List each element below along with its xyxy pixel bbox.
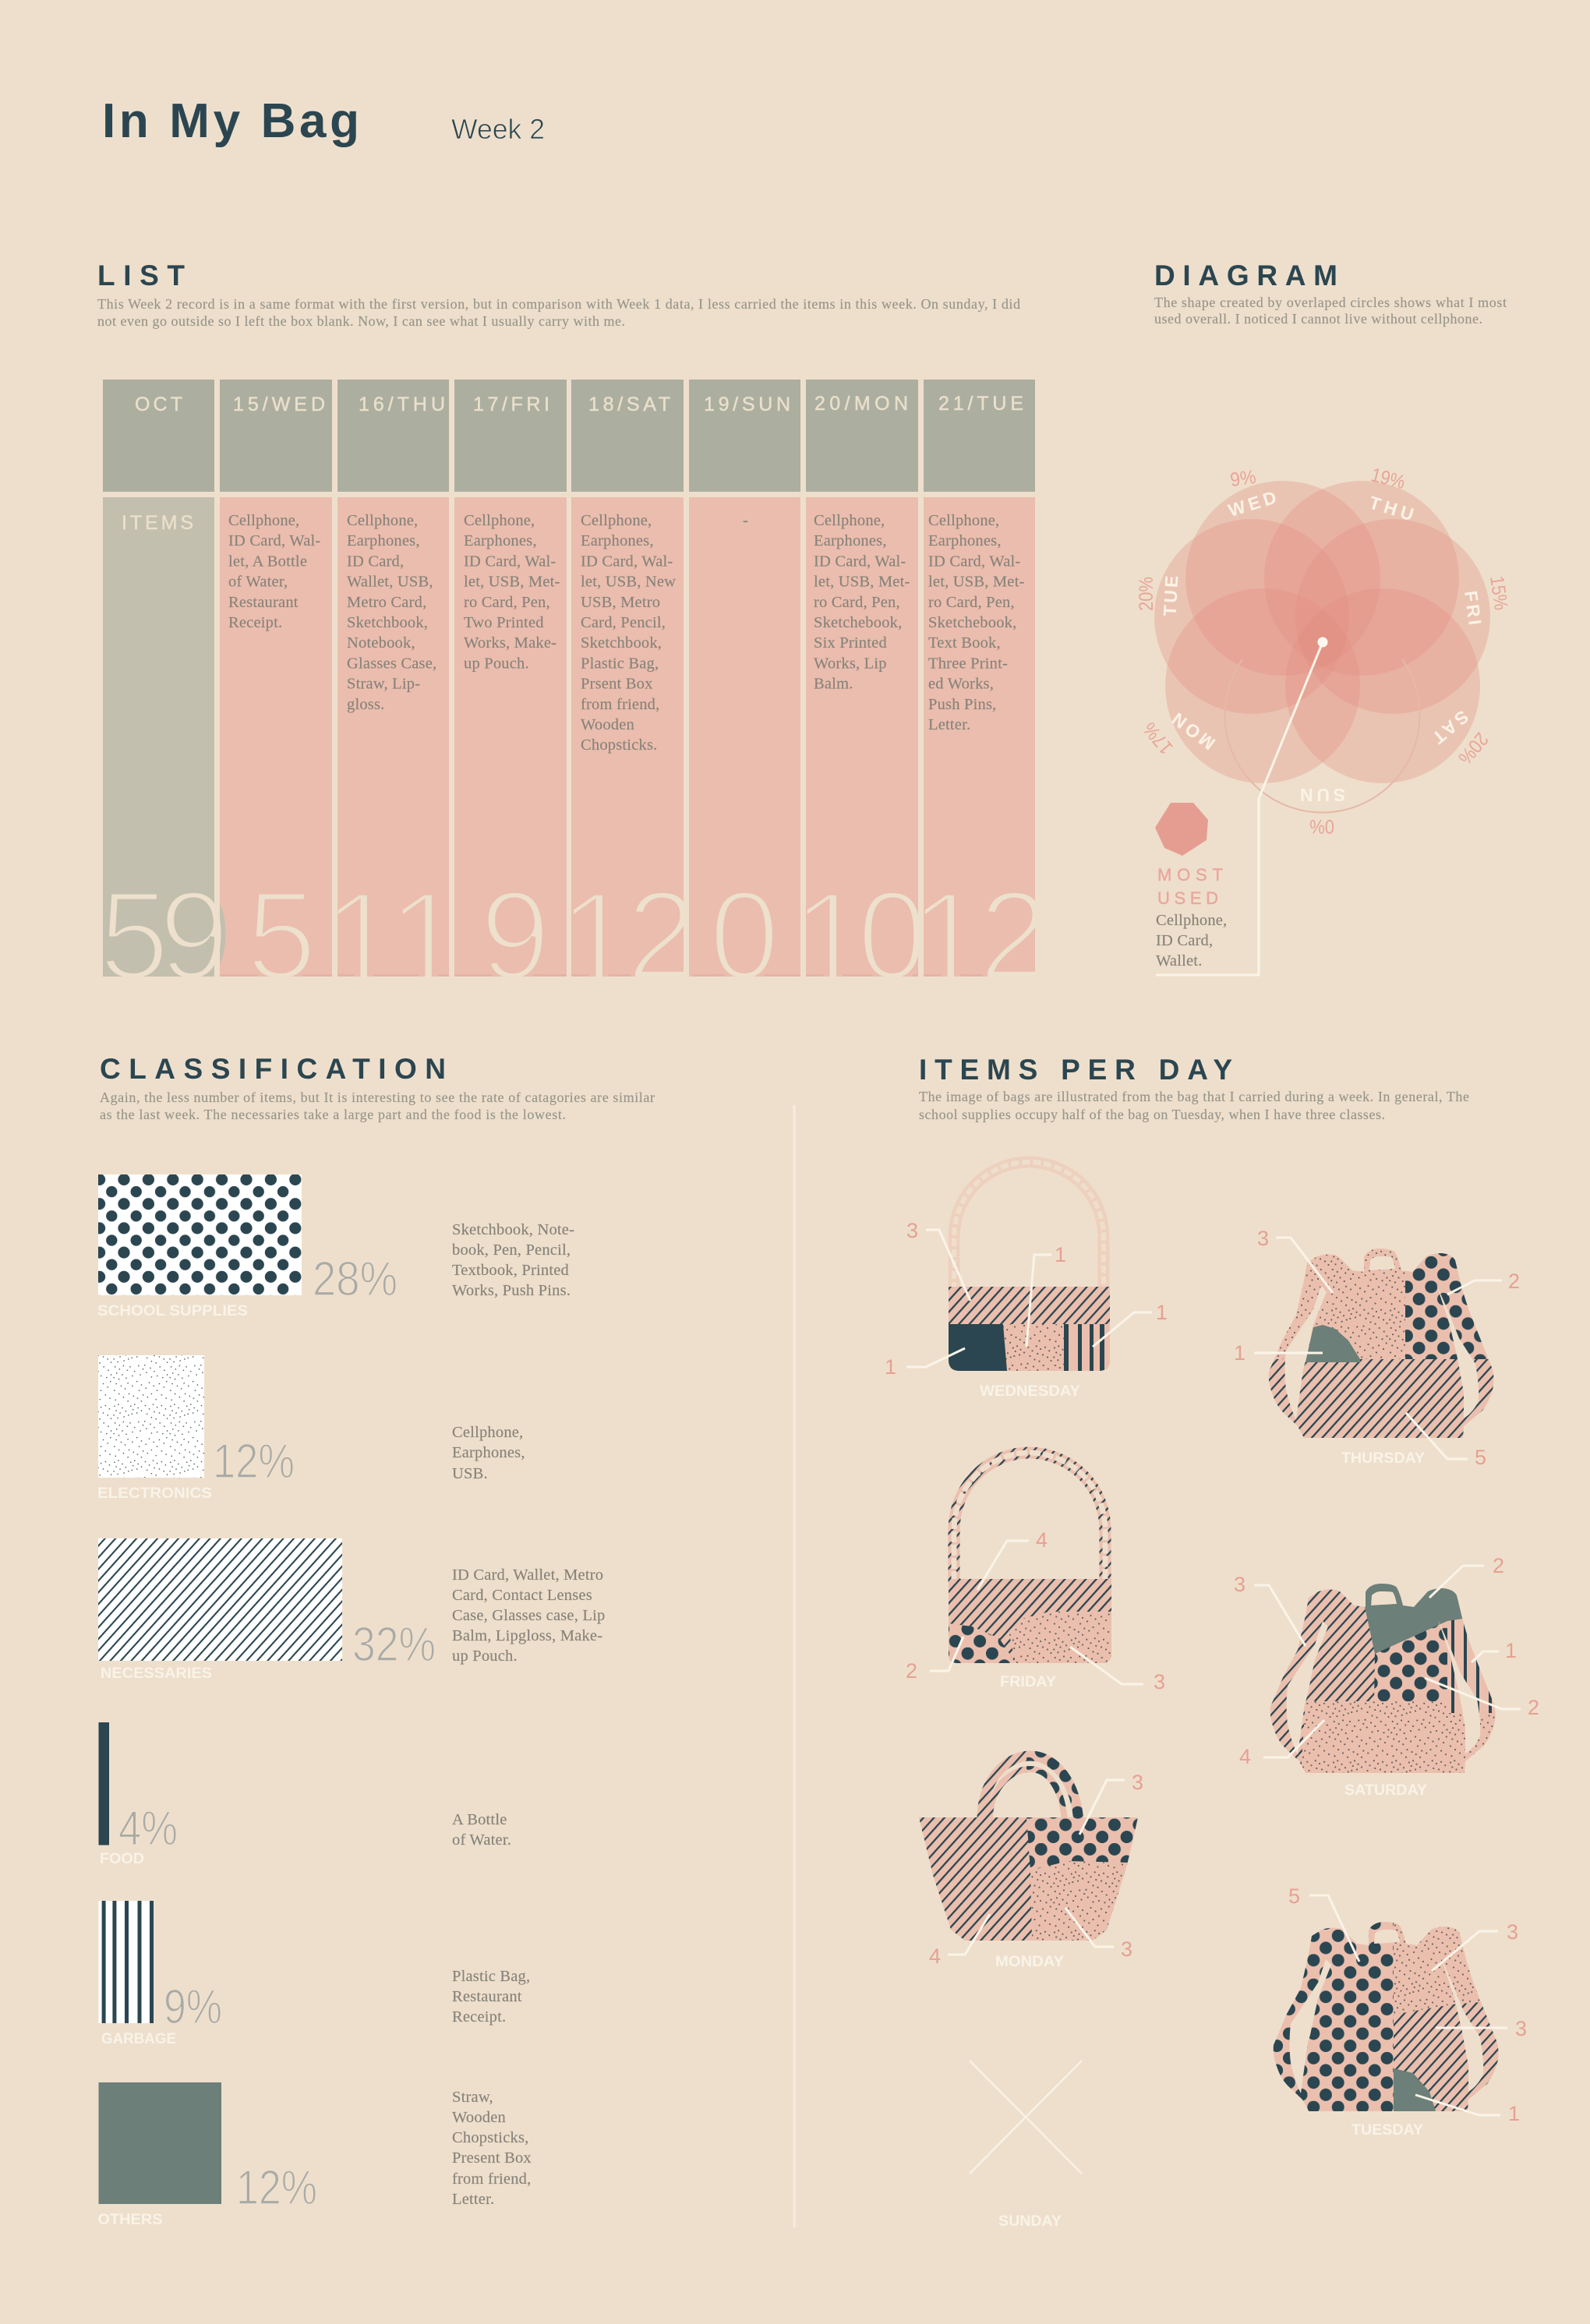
bar: electronics: 12% <box>213 1435 295 1489</box>
heading: items per day: ITEMS PER DAY <box>919 1054 1232 1086</box>
large item counts: 11 <box>321 862 466 1022</box>
diagram description: The shape created by overlaped circles shows what I most <box>1154 295 1507 310</box>
large item counts: 1 <box>790 862 871 1022</box>
classification description: as the last week. The necessaries take a large part and the food is the lowest. <box>100 1107 566 1122</box>
table item columns: Earphones, <box>464 532 537 549</box>
table item columns: Sketchebook, <box>928 614 1016 631</box>
table item columns: Straw, Lip- <box>347 676 420 693</box>
table item columns: Earphones, <box>928 532 1002 549</box>
bar: school supplies <box>97 1174 574 1319</box>
table item columns: Sketchbook, <box>581 634 662 652</box>
label: sunday: SUNDAY <box>998 2213 1062 2230</box>
table header row: 17/FRI <box>473 394 549 415</box>
panel: diagram <box>1136 260 1512 975</box>
bar: food: of Water. <box>452 1831 511 1849</box>
bar: school supplies: Textbook, Printed <box>452 1262 569 1279</box>
percentages: 9% <box>1229 466 1257 491</box>
table item columns: ro Card, Pen, <box>814 594 900 611</box>
label: thursday: THURSDAY <box>1341 1450 1425 1467</box>
table item columns: let, USB, Met- <box>928 574 1025 591</box>
table header row: 15/WED <box>233 394 325 415</box>
large item counts: 5 <box>246 865 316 1006</box>
bar: food <box>98 1722 511 1867</box>
bag: saturday <box>1234 1554 1539 1799</box>
table item columns: - <box>743 512 748 529</box>
percentages <box>1136 464 1512 837</box>
day labels: SAT <box>1429 706 1472 748</box>
bar: others: Present Box <box>452 2149 532 2167</box>
callouts: thursday: 1 <box>1234 1341 1246 1365</box>
percentages: 17% <box>1139 718 1178 758</box>
large item counts <box>86 497 1058 1022</box>
bar: garbage: Plastic Bag, <box>452 1968 530 1985</box>
classification description <box>100 1090 655 1122</box>
callouts: monday: 3 <box>1121 1937 1132 1961</box>
callouts: tuesday: 1 <box>1508 2102 1520 2125</box>
bar: necessaries: 32% <box>352 1618 436 1672</box>
table item columns: ro Card, Pen, <box>464 594 550 611</box>
bar: electronics <box>97 1355 525 1502</box>
table item columns: ID Card, Wal- <box>464 553 556 570</box>
label: friday: FRIDAY <box>1000 1673 1056 1690</box>
list description: This Week 2 record is in a same format with the first version, but in comparison with Week 1 data, I less carried the items in this week. On sunday, I did <box>97 296 1020 312</box>
table item columns: Three Print- <box>928 655 1008 672</box>
table item columns: Balm. <box>814 676 853 693</box>
day labels: TUE <box>1160 575 1182 616</box>
bar: necessaries: Case, Glasses case, Lip <box>452 1607 605 1624</box>
table item columns: Metro Card, <box>347 594 426 611</box>
bag: friday <box>906 1453 1165 1694</box>
table item columns: ID Card, <box>347 553 404 570</box>
panel: classification <box>97 1053 655 2228</box>
table item columns: ID Card, Wal- <box>228 532 320 549</box>
panel: items per day <box>885 1054 1539 2230</box>
bar: others: Wooden <box>452 2109 506 2126</box>
heading: list: LIST <box>97 260 185 291</box>
callouts: friday: 3 <box>1154 1670 1165 1694</box>
day labels: THU <box>1367 492 1416 524</box>
callouts: thursday <box>1234 1227 1520 1469</box>
bar: others: Letter. <box>452 2191 494 2208</box>
large item counts: 59 <box>99 865 229 1006</box>
table item columns: Wallet, USB, <box>347 574 433 591</box>
callouts: saturday: 3 <box>1234 1573 1246 1596</box>
bar: others: 12% <box>236 2161 317 2215</box>
table item columns: USB, Metro <box>581 594 660 611</box>
table item columns: Works, Lip <box>814 655 887 672</box>
bar: garbage: GARBAGE <box>101 2030 176 2047</box>
center dot <box>1317 638 1328 647</box>
bag: tuesday <box>1272 1884 1527 2139</box>
table item columns: let, A Bottle <box>228 553 307 570</box>
table item columns: Cellphone, <box>464 512 535 529</box>
bar: garbage: Receipt. <box>452 2008 506 2026</box>
callouts: friday: 2 <box>906 1659 917 1683</box>
table item columns: Cellphone, <box>228 512 299 529</box>
bar: food: A Bottle <box>452 1811 507 1828</box>
bar: others: Straw, <box>452 2089 493 2106</box>
diagram description <box>1154 295 1507 327</box>
bar: food: FOOD <box>100 1850 144 1867</box>
bar: others <box>98 2082 532 2228</box>
table item columns: of Water, <box>228 574 288 591</box>
callouts: tuesday <box>1288 1884 1527 2125</box>
table item columns: Push Pins, <box>928 696 996 713</box>
day labels: SUN <box>1300 785 1345 805</box>
table item columns: Cellphone, <box>814 512 885 529</box>
table item columns: Earphones, <box>581 532 654 549</box>
table item columns: Six Printed <box>814 634 887 652</box>
callouts: saturday: 1 <box>1505 1639 1517 1662</box>
icon: most used swatch <box>1155 803 1208 856</box>
table item columns: Cellphone, <box>581 512 652 529</box>
bar: electronics: Cellphone, <box>452 1424 523 1441</box>
table item columns: up Pouch. <box>464 655 529 672</box>
callouts: wednesday: 1 <box>885 1355 896 1379</box>
most used items: Cellphone, <box>1156 912 1227 929</box>
table item columns: ed Works, <box>928 676 994 693</box>
percentages: 0% <box>1309 815 1334 837</box>
table item columns: Cellphone, <box>928 512 999 529</box>
most used items: ID Card, <box>1156 932 1213 949</box>
bar: garbage: 9% <box>164 1980 222 2034</box>
day labels: MON <box>1168 708 1219 754</box>
callouts: tuesday: 3 <box>1507 1920 1518 1944</box>
table header row: OCT <box>135 394 182 415</box>
bar: food: 4% <box>118 1802 178 1856</box>
bag: wednesday <box>885 1162 1168 1400</box>
day labels: WED <box>1226 487 1279 521</box>
callouts: tuesday: 5 <box>1288 1884 1300 1908</box>
table item columns: Wooden <box>581 716 634 733</box>
leader line to most used <box>1156 642 1323 975</box>
label: tuesday: TUESDAY <box>1352 2121 1423 2139</box>
large item counts: 2 <box>627 865 697 1006</box>
table item columns: Earphones, <box>814 532 887 549</box>
table item columns: Restaurant <box>228 594 299 611</box>
bar: necessaries: ID Card, Wallet, Metro <box>452 1566 603 1584</box>
table item columns: let, USB, Met- <box>814 574 910 591</box>
overlapping circles <box>1154 481 1490 813</box>
bar: necessaries: up Pouch. <box>452 1648 518 1665</box>
large item counts: 2 <box>979 865 1049 1006</box>
large item counts: 1 <box>556 862 637 1022</box>
bar: garbage: Restaurant <box>452 1988 522 2005</box>
percentages: 15% <box>1486 574 1512 612</box>
table item columns: Letter. <box>928 716 970 733</box>
most used items <box>1156 912 1227 970</box>
bar: school supplies: Works, Push Pins. <box>452 1282 571 1299</box>
bar: necessaries: Card, Contact Lenses <box>452 1587 592 1604</box>
callouts: monday: 3 <box>1132 1771 1143 1794</box>
diagram description: used overall. I noticed I cannot live without cellphone. <box>1154 311 1482 327</box>
title: In My Bag: In My Bag <box>102 94 359 148</box>
large item counts: 9 <box>480 865 550 1006</box>
heading: classification: CLASSIFICATION <box>100 1053 446 1085</box>
bar: school supplies: book, Pen, Pencil, <box>452 1241 571 1259</box>
table item columns: Notebook, <box>347 634 415 652</box>
bar: school supplies: 28% <box>313 1252 398 1306</box>
callouts: thursday: 2 <box>1508 1270 1520 1293</box>
most used label: MOST <box>1157 865 1223 885</box>
items per day description <box>919 1089 1469 1122</box>
list description <box>97 296 1020 329</box>
items per day description: school supplies occupy half of the bag on Tuesday, when I have three classes. <box>919 1107 1385 1122</box>
table item columns: Two Printed <box>464 614 544 631</box>
table item columns: Earphones, <box>347 532 420 549</box>
most used label <box>1157 865 1223 908</box>
label: wednesday: WEDNESDAY <box>980 1383 1080 1400</box>
callouts: saturday: 4 <box>1239 1745 1251 1768</box>
bar: necessaries: Balm, Lipgloss, Make- <box>452 1627 602 1644</box>
bar: necessaries <box>98 1538 605 1682</box>
callouts: monday: 4 <box>929 1944 941 1968</box>
callouts: saturday: 2 <box>1493 1554 1504 1577</box>
classification description: Again, the less number of items, but It is interesting to see the rate of catagories are similar <box>100 1090 655 1105</box>
table header row <box>103 380 1035 492</box>
list description: not even go outside so I left the box blank. Now, I can see what I usually carry with me. <box>97 313 625 329</box>
table item columns <box>103 497 1035 977</box>
table item columns: let, USB, Met- <box>464 574 560 591</box>
percentages: 19% <box>1369 464 1408 493</box>
large item counts: 1 <box>908 862 988 1022</box>
bar: others: OTHERS <box>98 2211 162 2228</box>
bag: thursday <box>1234 1227 1520 1469</box>
percentages: 20% <box>1454 728 1493 768</box>
callouts: saturday <box>1234 1554 1539 1768</box>
table item columns: Cellphone, <box>347 512 418 529</box>
bag: monday <box>919 1756 1143 1970</box>
sunday: empty cross <box>970 2061 1082 2230</box>
table item columns: Plastic Bag, <box>581 655 659 672</box>
table item columns: ID Card, Wal- <box>581 553 673 570</box>
bar: electronics: USB. <box>452 1465 488 1482</box>
large item counts: 0 <box>857 865 928 1006</box>
bar: others: from friend, <box>452 2170 531 2188</box>
subtitle: Week 2: Week 2 <box>451 113 545 145</box>
table item columns: ro Card, Pen, <box>928 594 1015 611</box>
percentages: 20% <box>1136 577 1157 611</box>
table item columns: Sketchebook, <box>814 614 902 631</box>
table item columns: ID Card, Wal- <box>928 553 1020 570</box>
callouts: thursday: 3 <box>1257 1227 1269 1250</box>
table item columns: Sketchbook, <box>347 614 428 631</box>
callouts: wednesday: 1 <box>1055 1243 1066 1266</box>
items per day description: The image of bags are illustrated from the bag that I carried during a week. In general, The <box>919 1089 1469 1104</box>
bar: electronics: ELECTRONICS <box>97 1485 212 1502</box>
panel: list <box>86 260 1058 1022</box>
table item columns: Chopsticks. <box>581 736 657 754</box>
label: saturday: SATURDAY <box>1344 1782 1427 1799</box>
table item columns: Card, Pencil, <box>581 614 666 631</box>
table header row: 20/MON <box>814 393 908 415</box>
bar: garbage <box>98 1901 530 2047</box>
table item columns: ITEMS <box>122 512 193 534</box>
table header row: 18/SAT <box>588 394 670 415</box>
table item columns: from friend, <box>581 696 659 713</box>
table item columns: let, USB, New <box>581 574 676 591</box>
callouts: tuesday: 3 <box>1515 2017 1527 2040</box>
callouts: wednesday: 1 <box>1156 1301 1168 1324</box>
table item columns: Receipt. <box>228 614 282 631</box>
table item columns: Prsent Box <box>581 676 653 693</box>
bar: necessaries: NECESSARIES <box>101 1665 212 1682</box>
table item columns: Glasses Case, <box>347 655 436 672</box>
callouts: friday: 4 <box>1036 1528 1048 1552</box>
bar: school supplies: SCHOOL SUPPLIES <box>97 1302 248 1319</box>
table item columns: Text Book, <box>928 634 1001 652</box>
callouts: saturday: 2 <box>1528 1696 1539 1719</box>
callouts: wednesday: 3 <box>906 1219 918 1242</box>
table header row: 16/THU <box>359 394 445 415</box>
label: monday: MONDAY <box>995 1953 1064 1970</box>
day labels: FRI <box>1461 589 1486 626</box>
table item columns: gloss. <box>347 696 384 713</box>
bar: others: Chopsticks, <box>452 2129 528 2146</box>
callouts: monday <box>929 1771 1143 1968</box>
table header row: 21/TUE <box>938 393 1023 415</box>
most used items: Wallet. <box>1156 952 1203 970</box>
large item counts: 0 <box>709 865 779 1006</box>
callouts: friday <box>906 1528 1165 1694</box>
most used label: USED <box>1157 888 1218 908</box>
bar: electronics: Earphones, <box>452 1444 525 1461</box>
bar: school supplies: Sketchbook, Note- <box>452 1221 574 1238</box>
day labels <box>1160 487 1486 805</box>
heading: diagram: DIAGRAM <box>1154 260 1337 291</box>
table item columns: Works, Make- <box>464 634 556 652</box>
table item columns: ID Card, Wal- <box>814 553 906 570</box>
callouts: thursday: 5 <box>1475 1446 1486 1469</box>
table header row: 19/SUN <box>704 394 790 415</box>
callouts: wednesday <box>885 1219 1168 1379</box>
